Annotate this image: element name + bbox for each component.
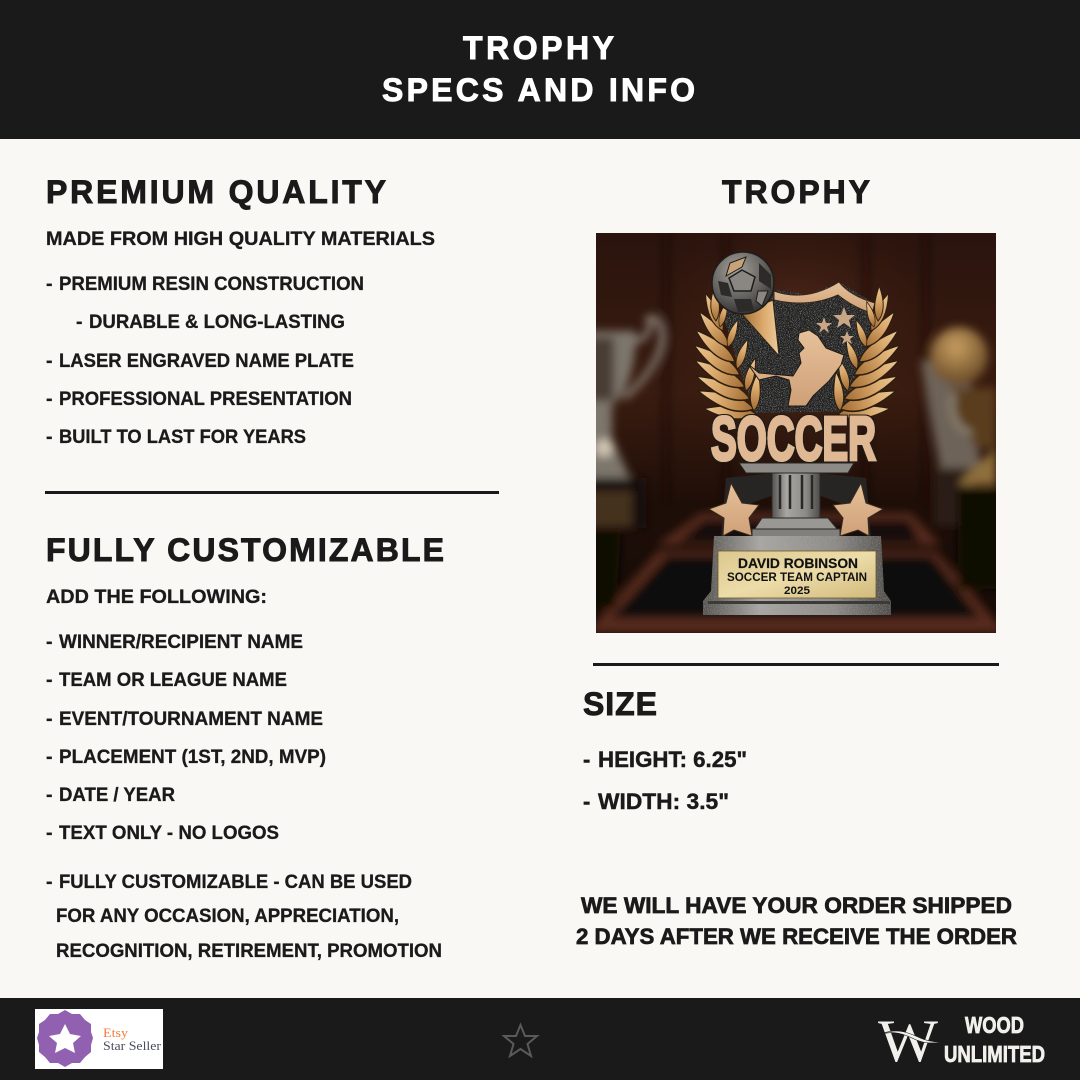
title line 1: TROPHY xyxy=(463,30,614,66)
kicker silhouette xyxy=(748,330,844,406)
list: customization options: - xyxy=(46,822,52,844)
name plate: SOCCER TEAM CAPTAIN xyxy=(727,570,867,584)
title line 2: SPECS AND INFO xyxy=(382,72,695,108)
list: quality features: DURABLE & LONG-LASTING xyxy=(89,311,345,333)
soccer lettering: SOCCER xyxy=(711,405,876,474)
pedestal xyxy=(721,463,871,539)
list: customization options: - xyxy=(46,784,52,806)
wreaths xyxy=(690,286,904,421)
list: customization options: - xyxy=(46,669,52,691)
comet tail xyxy=(741,300,779,356)
footer band xyxy=(0,998,1080,1080)
soccer ball xyxy=(712,252,774,314)
list: quality features: LASER ENGRAVED NAME PLATE xyxy=(59,350,354,372)
gold base stars xyxy=(709,483,883,536)
panel: premium quality xyxy=(46,174,435,448)
badge: etsy star seller xyxy=(35,1009,163,1069)
heading: premium quality: PREMIUM QUALITY xyxy=(46,174,386,210)
text block: occasions: RECOGNITION, RETIREMENT, PROMOTION xyxy=(56,940,442,962)
trophy shield xyxy=(690,252,904,615)
icon: purple scalloped star badge xyxy=(37,1010,93,1067)
list: quality features xyxy=(46,273,364,448)
list: customization options: TEXT ONLY - NO LOGOS xyxy=(59,822,279,844)
list: quality features: PREMIUM RESIN CONSTRUCTION xyxy=(59,273,364,295)
heading: trophy: TROPHY xyxy=(722,174,870,210)
list: customization options: DATE / YEAR xyxy=(59,784,175,806)
text block: occasions: FULLY CUSTOMIZABLE - CAN BE USED xyxy=(59,871,412,893)
shipping note: 2 DAYS AFTER WE RECEIVE THE ORDER xyxy=(576,924,1017,949)
name plate xyxy=(718,551,876,598)
name plate: DAVID ROBINSON xyxy=(738,555,858,571)
list: quality features: - xyxy=(46,426,52,448)
list: quality features: BUILT TO LAST FOR YEARS xyxy=(59,426,306,448)
logo: wood unlimited: W xyxy=(878,1008,938,1074)
list: customization options xyxy=(46,631,326,844)
list: customization options: WINNER/RECIPIENT NAME xyxy=(59,631,303,653)
list: customization options: - xyxy=(46,708,52,730)
heading: fully customizable: FULLY CUSTOMIZABLE xyxy=(46,532,444,568)
logo: wood unlimited: WOOD xyxy=(965,1012,1024,1038)
spec: width: - xyxy=(583,789,590,814)
list: quality features: - xyxy=(46,388,52,410)
subheading: add the following: ADD THE FOLLOWING: xyxy=(46,586,267,608)
trophy base xyxy=(703,536,891,615)
list: quality features: PROFESSIONAL PRESENTATION xyxy=(59,388,352,410)
spec: width: WIDTH: 3.5" xyxy=(598,789,729,814)
text block: occasions: - xyxy=(46,871,52,893)
text block: occasions xyxy=(46,871,442,962)
shipping note: WE WILL HAVE YOUR ORDER SHIPPED xyxy=(581,893,1012,918)
list: quality features: - xyxy=(46,273,52,295)
header band xyxy=(0,0,1080,139)
subheading: materials: MADE FROM HIGH QUALITY MATERIALS xyxy=(46,228,435,250)
list: customization options: EVENT/TOURNAMENT NAME xyxy=(59,708,323,730)
list: customization options: TEAM OR LEAGUE NAME xyxy=(59,669,287,691)
heading: size: SIZE xyxy=(583,686,657,722)
shipping note xyxy=(576,893,1017,949)
spec: height: - xyxy=(583,747,590,772)
product photo: soccer trophy xyxy=(586,233,1006,633)
small stars xyxy=(816,307,855,344)
list: quality features: - xyxy=(46,350,52,372)
logo: wood unlimited xyxy=(878,1008,1045,1074)
text block: occasions: FOR ANY OCCASION, APPRECIATION, xyxy=(56,905,399,927)
list: customization options: PLACEMENT (1ST, 2ND, MVP) xyxy=(59,746,326,768)
spec: height: HEIGHT: 6.25" xyxy=(598,747,747,772)
list: customization options: - xyxy=(46,631,52,653)
badge: etsy star seller: Star Seller xyxy=(103,1039,162,1053)
list: customization options: - xyxy=(46,746,52,768)
badge: etsy star seller: Etsy xyxy=(103,1026,129,1040)
logo: wood unlimited: UNLIMITED xyxy=(944,1041,1045,1067)
name plate: 2025 xyxy=(784,585,810,597)
icon: outlined star xyxy=(504,1025,537,1056)
list: quality features: - xyxy=(76,311,82,333)
panel: size xyxy=(583,686,747,814)
panel: fully customizable xyxy=(46,532,444,962)
